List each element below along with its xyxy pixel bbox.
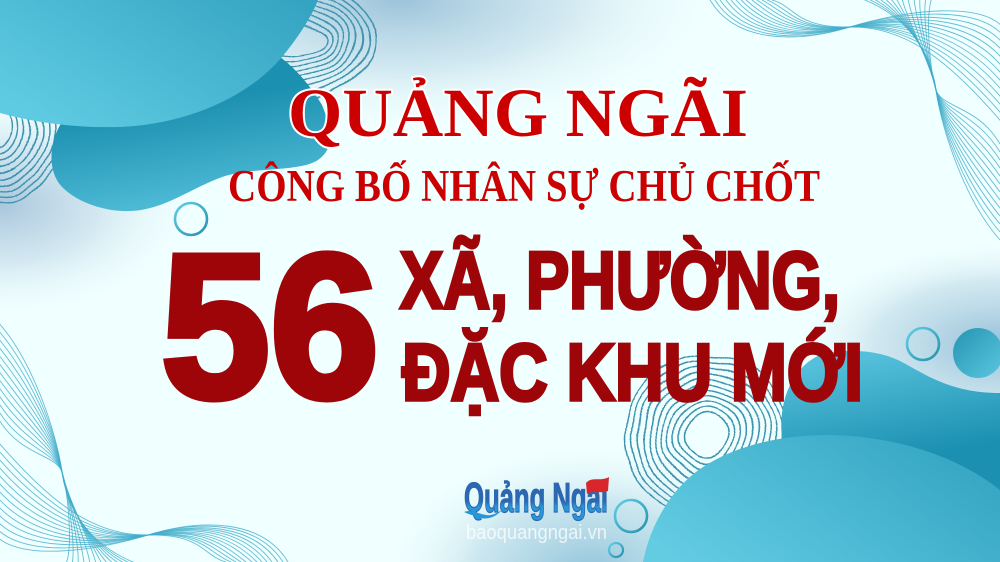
ring: left (175, 203, 207, 235)
ring: right (907, 328, 939, 360)
blob: dark bottom right (781, 351, 1000, 520)
icon: flag (586, 477, 609, 494)
icon: swoosh (464, 510, 502, 519)
wave pattern: top (282, 0, 377, 99)
headline line 1: XÃ, PHƯỜNG, (400, 235, 840, 326)
headline line 2: ĐẶC KHU MỚI (402, 327, 863, 418)
website: baoquangngai.vn (466, 522, 607, 544)
subtitle: CÔNG BỐ NHÂN SỰ CHỦ CHỐT (228, 161, 820, 211)
ribbon lines: top right (710, 0, 1000, 240)
ribbon lines: bottom left (0, 322, 288, 562)
ring: bottom large (615, 500, 647, 532)
blob: light bottom right (643, 435, 1000, 562)
wave pattern: left (0, 115, 57, 204)
ring: bottom small (609, 543, 623, 557)
blob: dark top left (51, 57, 330, 211)
big number 56: 56 (161, 212, 379, 441)
logo: Quang Ngai newspaper (464, 474, 609, 544)
wave pattern: bottom right (625, 354, 789, 518)
filled circle: right (953, 328, 1000, 378)
title: Quảng Ngãi: QUẢNG NGÃI (288, 75, 748, 151)
logo: Quang Ngai newspaper: Quảng Ngải (464, 474, 608, 521)
blob: light top left (0, 0, 318, 127)
